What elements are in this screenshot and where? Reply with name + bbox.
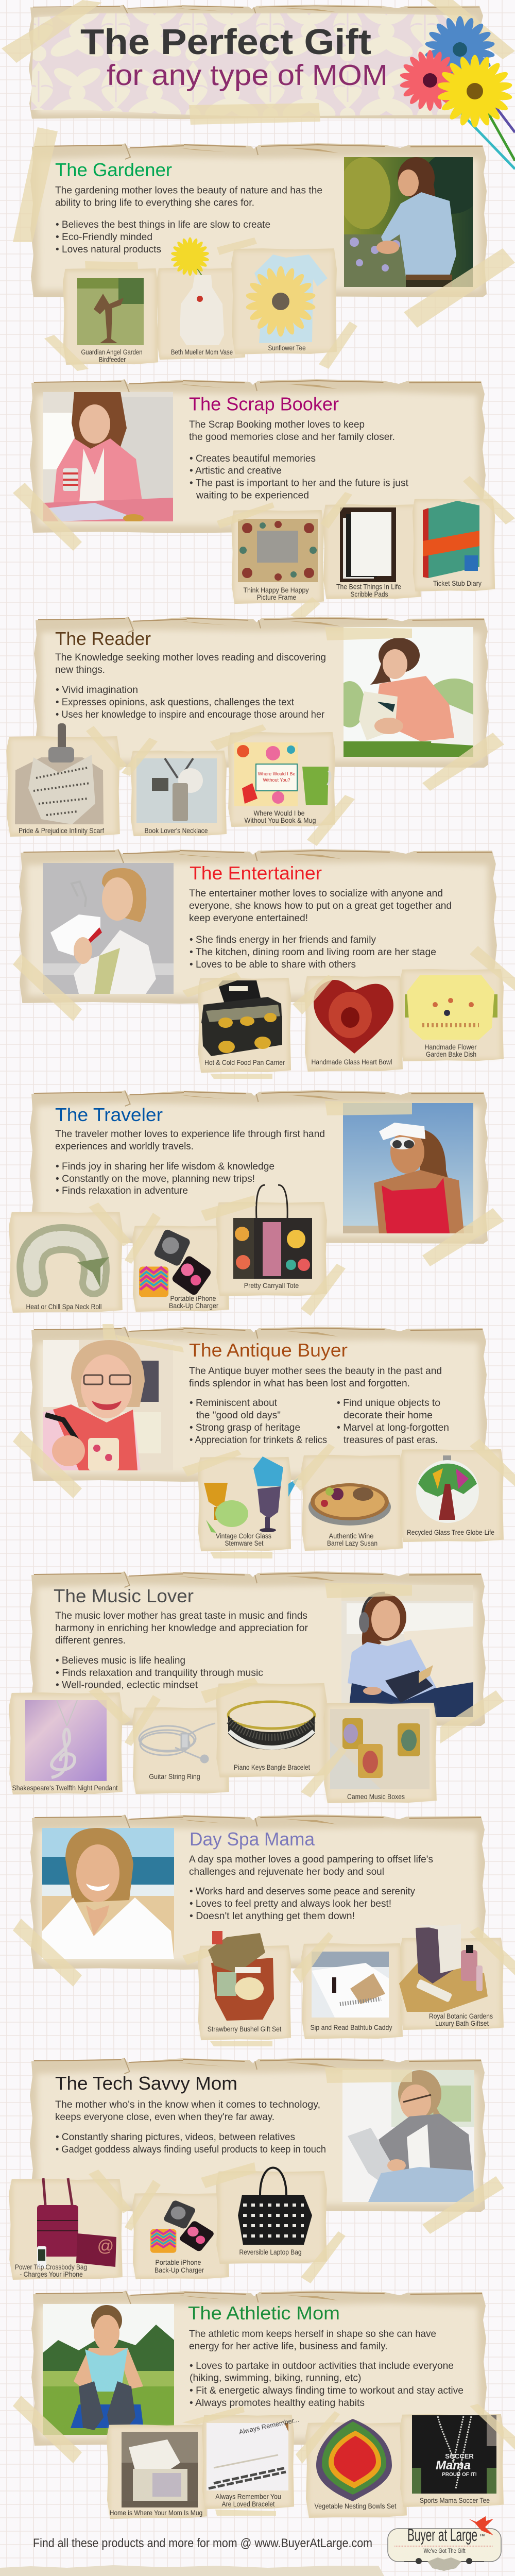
panel: Day Spa Mama	[13, 1815, 515, 2046]
description	[55, 1129, 325, 1152]
product image	[238, 519, 318, 582]
caption: - Charges Your iPhone	[20, 2270, 83, 2278]
product card: neck roll	[9, 1212, 123, 1313]
product card: bracelet	[202, 2415, 300, 2509]
caption: Cameo Music Boxes	[347, 1792, 405, 1801]
heading: The Gardener	[55, 159, 172, 180]
bullet list: • Eco-Friendly minded	[56, 232, 152, 243]
icon: hummingbird	[469, 2516, 493, 2535]
panel: The Scrap Booker	[13, 379, 515, 621]
description	[189, 1366, 442, 1389]
caption: Pride & Prejudice Infinity Scarf	[19, 826, 104, 835]
caption: Book Lover's Necklace	[144, 826, 208, 835]
product image: PROUD OF IT!	[442, 2472, 477, 2478]
heading: The Perfect Gift	[80, 22, 371, 62]
description	[55, 1611, 308, 1646]
bullet list: • Expresses opinions, ask questions, challenges the text	[56, 697, 295, 708]
tapes	[13, 476, 515, 621]
product image	[139, 1723, 215, 1762]
product image: Always Remember...	[238, 2415, 300, 2436]
description: keep everyone entertained!	[189, 913, 308, 924]
product image	[405, 975, 497, 1040]
bullet list	[190, 935, 436, 970]
product image	[25, 1700, 107, 1781]
product image	[122, 2432, 198, 2507]
bullet list: • Fit & energetic always finding time to workout and stay active	[190, 2385, 464, 2396]
bullet list: right column: decorate their home	[344, 1410, 433, 1421]
bullet list: • Constantly sharing pictures, videos, between relatives	[56, 2132, 295, 2143]
product card: nesting bowls	[305, 2419, 407, 2518]
bullet list: • Finds relaxation and tranquility through music	[56, 1668, 263, 1679]
caption	[154, 2258, 204, 2274]
caption: Home is Where Your Mom Is Mug	[110, 2509, 202, 2517]
product card: charger	[132, 1226, 229, 1312]
caption: Royal Botanic Gardens	[429, 2012, 493, 2020]
damask wallpaper	[31, 13, 480, 116]
caption	[336, 582, 401, 598]
description: keeps everyone close, even when they're far away.	[55, 2112, 274, 2123]
photo: gardener woman	[344, 157, 473, 287]
product image: @	[97, 2236, 114, 2255]
product card: strawberry bushel	[198, 1931, 291, 2040]
tapes	[13, 2396, 515, 2516]
caption: Pretty Carryall Tote	[244, 1281, 299, 1290]
tapes	[89, 2067, 504, 2283]
bullet list: right column	[337, 1398, 449, 1446]
product image	[136, 758, 217, 823]
description: experiences and worldly travels.	[55, 1141, 194, 1152]
caption: Garden Bake Dish	[426, 1050, 476, 1058]
panel: The Gardener	[13, 127, 515, 371]
description	[189, 2329, 436, 2352]
description: The gardening mother loves the beauty of nature and has the	[55, 185, 322, 196]
bullet list	[56, 2132, 326, 2155]
caption: Scribble Pads	[350, 590, 388, 598]
product image	[330, 1709, 430, 1789]
caption: Heat or Chill Spa Neck Roll	[26, 1302, 102, 1311]
caption	[244, 809, 316, 824]
product card: stemware	[198, 1456, 299, 1551]
product card: guitar string ring	[132, 1707, 229, 1794]
bullet list: • Loves to feel pretty and always look her best!	[190, 1899, 391, 1909]
caption: Birdfeeder	[99, 355, 126, 364]
caption	[15, 2263, 87, 2278]
bullet list: left column: • Appreciation for trinkets & relics	[190, 1435, 327, 1446]
caption: Vegetable Nesting Bowls Set	[314, 2502, 397, 2510]
caption: Recycled Glass Tree Globe-Life	[407, 1528, 494, 1536]
bullet list: • Loves to partake in outdoor activities that include everyone	[190, 2361, 454, 2371]
caption: Picture Frame	[257, 593, 296, 601]
heading: The Antique Buyer	[189, 1340, 348, 1361]
bullet list: left column: • Reminiscent about	[190, 1398, 278, 1409]
photo: reading woman	[344, 627, 473, 757]
panel: The Athletic Mom	[13, 2291, 515, 2519]
description: new things.	[55, 665, 105, 675]
description	[55, 185, 322, 208]
bullet list: right column: • Marvel at long-forgotten	[337, 1422, 449, 1433]
description: energy for her active life, business and family.	[189, 2341, 387, 2352]
photo: woman with teacup	[43, 1340, 173, 1470]
caption: Reversible Laptop Bag	[239, 2248, 302, 2256]
product card: bathtub caddy	[301, 1943, 403, 2039]
description: The mother who's in the know when it comes to technology,	[55, 2099, 320, 2110]
panel: The Traveler	[9, 1090, 504, 1316]
photo: stretching woman	[43, 2304, 174, 2435]
heading: The Reader	[55, 628, 151, 649]
caption: Ticket Stub Diary	[433, 579, 482, 587]
product image: Mama	[436, 2459, 471, 2472]
description: The Knowledge seeking mother loves reading and discovering	[55, 652, 326, 663]
panel: The Antique Buyer	[13, 1324, 515, 1558]
heading: The Music Lover	[54, 1585, 194, 1606]
bullet list: left column	[190, 1398, 327, 1446]
logo ornament	[404, 2557, 484, 2571]
description: the good memories close and her family closer.	[189, 432, 395, 443]
product image	[201, 980, 282, 1056]
panel: The Tech Savvy Mom	[9, 2058, 504, 2283]
product card: picture frame	[231, 510, 324, 604]
description: ability to bring life to everything she cares for.	[55, 198, 254, 208]
product card: soccer tee	[400, 2414, 504, 2507]
caption: Sunflower Tee	[268, 344, 306, 352]
product card: mom mug	[107, 2425, 207, 2519]
photo: woman with headphones	[347, 1585, 473, 1717]
logo: Buyer at Large	[388, 2516, 501, 2571]
bullet list: left column: • Strong grasp of heritage	[190, 1422, 300, 1433]
description: different genres.	[55, 1635, 126, 1646]
photo: scrapbooking woman	[43, 392, 173, 521]
product card: tee	[231, 248, 337, 354]
product card: ticket stub diary	[413, 499, 495, 591]
product image	[139, 1228, 212, 1297]
caption: Barrel Lazy Susan	[327, 1539, 377, 1547]
bullet list: • Gadget goddess always finding useful products to keep in touch	[56, 2144, 326, 2155]
bullet list	[56, 1655, 263, 1691]
footer call to action: Find all these products and more for mom @ www.BuyerAtLarge.com	[33, 2536, 372, 2550]
caption: The Best Things In Life	[336, 582, 401, 590]
bullet list: • Works hard and deserves some peace and serenity	[190, 1886, 415, 1897]
product card: cameo music boxes	[323, 1703, 437, 1803]
caption	[169, 1294, 218, 1310]
product image	[207, 2415, 300, 2490]
heading: The Scrap Booker	[189, 394, 339, 414]
product image	[399, 1924, 488, 2012]
caption	[216, 1532, 271, 1547]
description: The traveler mother loves to experience life through first hand	[55, 1129, 325, 1140]
product image: Where Would I Be	[258, 771, 295, 776]
bullet list	[190, 1886, 415, 1922]
product image	[37, 2178, 116, 2268]
bullet list: (hiking, swimming, biking, running, etc)	[190, 2373, 362, 2383]
product card: glass heart bowl	[304, 976, 403, 1072]
caption: Portable iPhone	[156, 2258, 201, 2266]
panel: The Reader	[6, 617, 504, 846]
product card: glass globe	[400, 1449, 504, 1542]
heading: The Tech Savvy Mom	[55, 2073, 237, 2094]
description: The music lover mother has great taste in music and finds	[55, 1611, 307, 1621]
bullet list: • Believes music is life healing	[56, 1655, 185, 1666]
panel: title banner	[29, 5, 484, 119]
caption	[424, 1043, 477, 1058]
product image	[312, 1952, 389, 2018]
product card: treble pendant	[9, 1692, 123, 1794]
product image	[31, 1239, 109, 1288]
caption: Back-Up Charger	[154, 2266, 204, 2274]
product card: tote	[216, 1185, 327, 1296]
tape	[13, 127, 58, 242]
description	[189, 1854, 433, 1877]
caption: Strawberry Bushel Gift Set	[208, 2025, 281, 2033]
product card: vase	[157, 232, 245, 360]
heading: The Traveler	[55, 1104, 163, 1125]
panel: The Music Lover	[9, 1571, 504, 1803]
caption: Piano Keys Bangle Bracelet	[234, 1763, 310, 1771]
product image	[150, 2199, 215, 2253]
product image	[204, 1456, 299, 1533]
product card: necklace	[130, 751, 227, 836]
caption: Shakespeare's Twelfth Night Pendant	[12, 1784, 118, 1792]
bullet list: • The kitchen, dining room and living room are her stage	[190, 947, 436, 958]
caption: Always Remember You	[215, 2493, 281, 2501]
bullet list: • Artistic and creative	[190, 466, 282, 476]
description: A day spa mother loves a good pampering to offset life's	[189, 1854, 433, 1865]
heading: The Athletic Mom	[188, 2302, 340, 2324]
caption: Luxury Bath Giftset	[435, 2019, 489, 2027]
photo: woman in robe at beach	[42, 1828, 174, 1959]
caption: Power Trip Crossbody Bag	[15, 2263, 87, 2271]
caption: Guardian Angel Garden	[81, 348, 142, 356]
description: The athletic mom keeps herself in shape so she can have	[189, 2329, 436, 2340]
product card: scribble pads	[323, 504, 421, 599]
caption: Handmade Glass Heart Bowl	[311, 1058, 392, 1066]
flower bouquet	[400, 16, 515, 169]
product image	[238, 2168, 312, 2245]
caption: Handmade Flower	[424, 1043, 477, 1051]
logo: Buyer at Large: We've Got The Gift	[423, 2547, 466, 2554]
product image: Without You?	[263, 777, 290, 783]
photo: woman with visor	[343, 1103, 473, 1233]
product image	[308, 1483, 391, 1526]
product card: lazy susan	[301, 1455, 403, 1551]
caption: Beth Mueller Mom Vase	[171, 348, 233, 356]
caption	[429, 2012, 493, 2027]
description: everyone, she knows how to put on a great get together and	[189, 901, 452, 911]
description	[55, 2099, 320, 2123]
caption: Think Happy Be Happy	[243, 586, 309, 594]
caption: Portable iPhone	[170, 1294, 216, 1302]
bullet list: • Uses her knowledge to inspire and encourage those around her	[56, 709, 325, 720]
caption: Authentic Wine	[329, 1532, 374, 1540]
product card: crossbody bag	[9, 2178, 123, 2280]
caption: Where Would I be	[253, 809, 305, 817]
photo: woman with mixer	[43, 863, 174, 994]
product card: infinity scarf	[6, 723, 120, 837]
tapes	[86, 627, 504, 846]
product image	[233, 1185, 312, 1279]
bullet list: • Well-rounded, eclectic mindset	[56, 1680, 198, 1691]
product card: book and mug	[228, 732, 335, 827]
bullet list: • Always promotes healthy eating habits	[190, 2398, 365, 2409]
bullet list: • Creates beautiful memories	[190, 453, 316, 464]
caption: Hot & Cold Food Pan Carrier	[204, 1058, 285, 1066]
bullet list: • The past is important to her and the future is just	[190, 478, 409, 488]
bullet list: • Loves natural products	[56, 244, 161, 255]
bullet list	[56, 219, 270, 255]
description: The Scrap Booking mother loves to keep	[189, 419, 365, 430]
product image	[316, 2419, 392, 2501]
product image	[314, 980, 393, 1054]
torn paper strip at bottom	[0, 2565, 384, 2576]
bullet list: • Constantly on the move, planning new trips!	[56, 1174, 255, 1184]
bullet list: • Doesn't let anything get them down!	[190, 1911, 355, 1922]
product card: food carrier	[198, 978, 291, 1073]
bullet list: • Loves to be able to share with others	[190, 959, 356, 970]
tapes	[13, 1324, 515, 1558]
tapes	[44, 238, 515, 371]
logo: Buyer at Large: TM	[479, 2534, 485, 2537]
product image	[423, 501, 479, 578]
description	[189, 419, 395, 443]
product image: SOCCER	[445, 2452, 474, 2460]
bullet list	[56, 685, 325, 720]
product image	[340, 507, 396, 582]
tapes	[89, 1101, 504, 1316]
bullet list: waiting to be experienced	[196, 490, 309, 501]
caption: Are Loved Bracelet	[221, 2500, 275, 2508]
product image	[165, 232, 224, 345]
product card: bath giftset	[399, 1924, 504, 2030]
description: harmony in enriching her knowledge and appreciation for	[55, 1623, 308, 1634]
product card: charger	[132, 2193, 229, 2279]
description: The Antique buyer mother sees the beauty in the past and	[189, 1366, 442, 1377]
caption	[215, 2493, 281, 2508]
product image	[412, 2415, 496, 2494]
product image	[228, 1702, 315, 1750]
bullet list: • Finds joy in sharing her life wisdom & knowledge	[56, 1161, 274, 1172]
product card: birdfeeder	[63, 268, 158, 365]
bullet list	[190, 453, 409, 501]
caption: Stemware Set	[225, 1539, 264, 1547]
product card: bake dish	[400, 969, 504, 1061]
tapes on banner	[2, 0, 515, 125]
description	[189, 888, 452, 924]
caption	[327, 1532, 377, 1547]
caption: Vintage Color Glass	[216, 1532, 271, 1540]
panel: The Entertainer	[13, 849, 515, 1079]
caption	[243, 586, 309, 601]
bullet list: • Believes the best things in life are slow to create	[56, 219, 270, 230]
product image	[77, 278, 144, 345]
caption: Guitar String Ring	[149, 1772, 200, 1781]
bullet list: left column: the "good old days"	[196, 1410, 281, 1421]
description: finds splendor in what has been lost and forgotten.	[189, 1378, 410, 1389]
caption: Back-Up Charger	[169, 1301, 218, 1310]
product card: piano bracelet	[216, 1683, 327, 1777]
description	[55, 652, 326, 675]
caption: Sip and Read Bathtub Caddy	[310, 2023, 392, 2031]
heading: Day Spa Mama	[190, 1828, 315, 1850]
bullet list: right column: treasures of past eras.	[344, 1435, 438, 1446]
tapes	[13, 1919, 515, 2046]
caption: Sports Mama Soccer Tee	[420, 2496, 490, 2504]
bullet list	[190, 2361, 464, 2409]
bullet list	[56, 1161, 274, 1196]
tapes	[89, 1583, 504, 1798]
product image	[245, 255, 328, 343]
description: challenges and rejuvenate her body and soul	[189, 1867, 384, 1877]
heading: The Entertainer	[190, 862, 322, 884]
bullet list: • Finds relaxation in adventure	[56, 1185, 188, 1196]
product image	[234, 742, 331, 806]
tapes	[13, 946, 515, 1079]
bullet list: • She finds energy in her friends and family	[190, 935, 376, 945]
subheading: for any type of MOM	[107, 59, 388, 92]
photo: woman with tablet	[342, 2070, 474, 2202]
product image	[15, 723, 104, 824]
product card: laptop bag	[216, 2168, 327, 2264]
description: The entertainer mother loves to socialize with anyone and	[189, 888, 443, 899]
product image	[208, 1931, 274, 2021]
bullet list: right column: • Find unique objects to	[337, 1398, 440, 1409]
caption	[81, 348, 142, 364]
product image	[416, 1455, 479, 1523]
caption: Without You Book & Mug	[244, 816, 316, 824]
bullet list: • Vivid imagination	[56, 685, 138, 696]
